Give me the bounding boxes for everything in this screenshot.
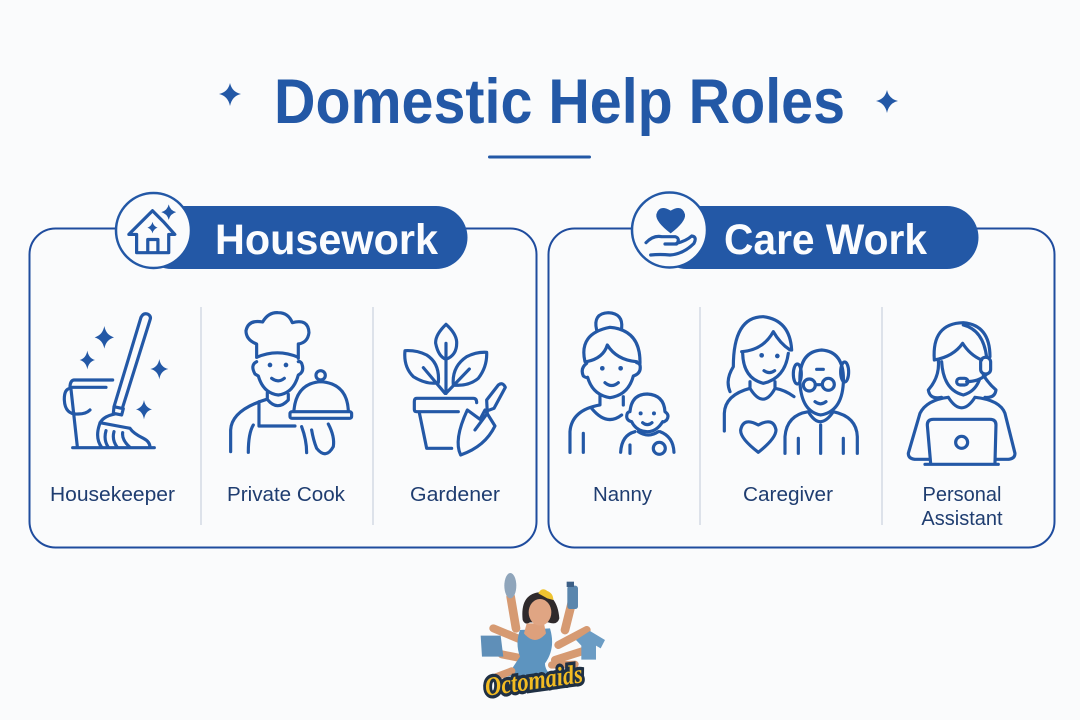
label: housekeeper: Housekeeper [50,484,175,506]
icon: caregiver with elder [724,317,857,453]
icon: nanny with baby [570,313,674,454]
panel: care work [548,192,1054,548]
header pill: housework: Housework [215,216,438,264]
header pill: care work [632,192,978,269]
head and hair [522,592,559,624]
label: gardener: Gardener [410,484,500,506]
divider lines [700,307,882,525]
header pill: care work: Care Work [724,216,927,264]
panel: housework [30,193,536,548]
icon: heart in hand [646,208,695,255]
icon: right title sparkle [876,90,898,113]
icon: gardener plant and trowel [405,324,505,455]
label: personal assistant: Assistant [921,508,1003,530]
body and dress [507,628,553,677]
wordmark: Octomaids [483,658,585,702]
icon: private cook [231,313,352,454]
header pill: housework [116,193,468,269]
label: nanny: Nanny [593,484,652,506]
icon: left title sparkle [219,83,241,106]
raised arms and tools [511,597,572,630]
icon: sparkling house [129,204,176,253]
divider lines [201,307,373,525]
side arms [493,628,587,660]
label: personal assistant: Personal [923,484,1001,506]
title: Domestic Help Roles [274,67,845,137]
icon: personal assistant with headset [908,323,1015,464]
label: private cook: Private Cook [227,484,346,506]
label: caregiver: Caregiver [743,484,833,506]
icon: mop and bucket [64,314,168,448]
logo: Octomaids mascot [481,573,605,702]
